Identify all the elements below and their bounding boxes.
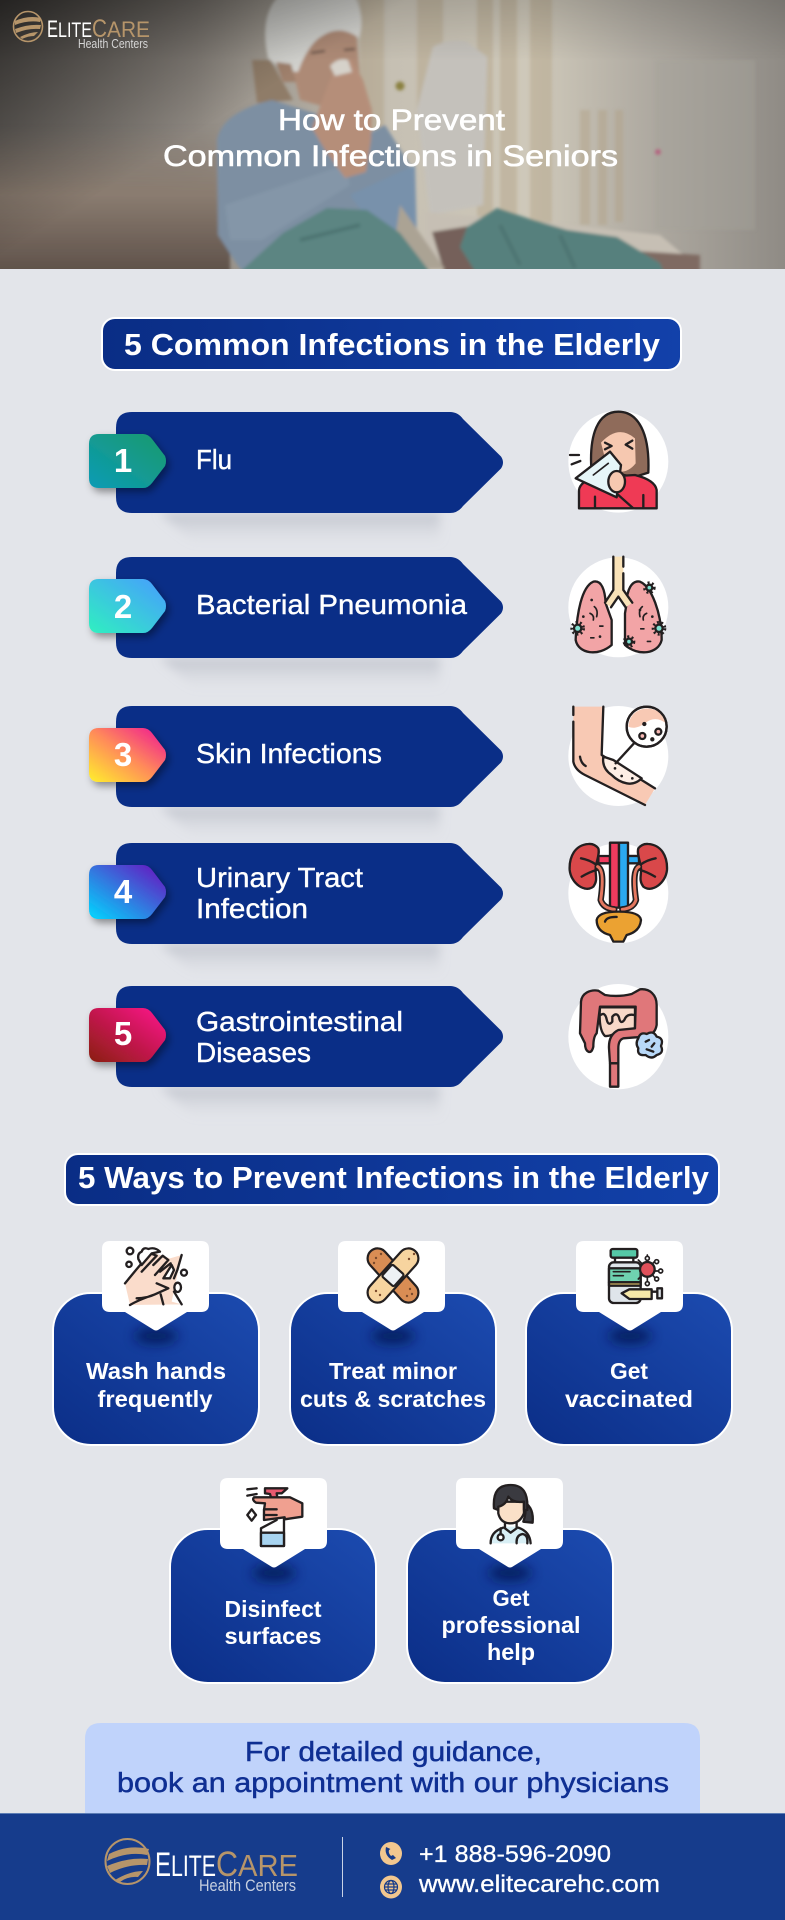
contact: phone number: +1 888-596-2090 <box>419 1841 611 1868</box>
banner 2: Bacterial Pneumonia: Bacterial Pneumonia <box>196 589 468 620</box>
badge 2: 2 <box>114 588 132 625</box>
icon: kidneys and bladder <box>568 843 668 943</box>
footer logo: Elite Care Health Centers: Health Centers <box>199 1877 296 1895</box>
card: Get professional help <box>407 1478 613 1683</box>
call to action panel: For detailed guidance, <box>245 1736 542 1767</box>
icon: crossed bandages <box>363 1244 423 1307</box>
badge 5 <box>89 1008 166 1062</box>
icon: phone <box>380 1842 402 1865</box>
badge 3: 3 <box>114 736 132 773</box>
header logo: Elite Care Health Centers: LITE <box>58 19 92 42</box>
badge 4 <box>89 865 166 919</box>
card: Wash hands frequently: frequently <box>98 1386 213 1412</box>
header logo: Elite Care Health Centers <box>14 12 150 51</box>
icon: vaccine vial, virus and syringe <box>609 1249 663 1303</box>
banner 4: Urinary Tract Infection: Urinary Tract <box>196 862 363 893</box>
card: Get professional help: professional <box>442 1612 580 1638</box>
title: How to Prevent <box>278 104 506 137</box>
banner 4: Urinary Tract Infection: Infection <box>196 893 308 924</box>
banner 3: Skin Infections <box>89 706 503 838</box>
title <box>163 104 618 173</box>
icon: arm with skin rash and magnifier <box>568 706 668 806</box>
header logo: Elite Care Health Centers: ARE <box>107 17 150 42</box>
banner 5: Gastrointestinal Diseases <box>89 986 503 1118</box>
footer logo: Elite Care Health Centers: ARE <box>238 1848 298 1883</box>
card: Get professional help: help <box>487 1639 535 1665</box>
header logo: Elite Care Health Centers: Health Centers <box>78 37 148 51</box>
card: Treat minor cuts & scratches: cuts & scratches <box>300 1386 486 1412</box>
footer band <box>0 1813 785 1920</box>
banner 3: Skin Infections: Skin Infections <box>196 738 382 769</box>
icon: washing hands <box>125 1248 187 1305</box>
icon: intestines with bacteria <box>568 984 668 1089</box>
call to action panel: book an appointment with our physicians <box>117 1767 669 1798</box>
heading: 5 Ways to Prevent Infections in the Elderly <box>65 1154 719 1205</box>
footer logo: Elite Care Health Centers: C <box>216 1845 238 1884</box>
banner 5: Gastrointestinal Diseases: Diseases <box>196 1037 311 1068</box>
header logo: Elite Care Health Centers: C <box>92 15 107 43</box>
badge 1: 1 <box>114 442 132 479</box>
badge 4: 4 <box>114 873 133 910</box>
call to action panel <box>85 1723 700 1813</box>
card: Get vaccinated: Get <box>610 1358 648 1384</box>
icon: globe <box>380 1876 402 1898</box>
heading: 5 Common Infections in the Elderly: 5 Common Infections in the Elderly <box>124 328 660 362</box>
card: Get professional help: Get <box>492 1585 530 1611</box>
footer logo: Elite Care Health Centers <box>106 1839 298 1895</box>
card: Disinfect surfaces: surfaces <box>224 1623 322 1649</box>
banner 5: Gastrointestinal Diseases: Gastrointestinal <box>196 1006 403 1037</box>
hero photo: senior woman blowing her nose on a sofa <box>0 0 785 280</box>
footer logo: Elite Care Health Centers: E <box>155 1846 171 1884</box>
badge 2 <box>89 579 166 633</box>
heading: 5 Ways to Prevent Infections in the Elderly: 5 Ways to Prevent Infections in the Elderly <box>78 1161 709 1195</box>
card: Wash hands frequently <box>53 1241 259 1445</box>
footer logo: Elite Care Health Centers: LITE <box>171 1850 216 1883</box>
badge 3 <box>89 728 166 782</box>
card: Wash hands frequently: Wash hands <box>86 1358 226 1384</box>
heading: 5 Common Infections in the Elderly <box>102 318 681 370</box>
badge 5: 5 <box>114 1015 132 1052</box>
banner 1: Flu <box>89 412 503 544</box>
card: Get vaccinated <box>526 1241 732 1445</box>
icon: spray bottle held in hand <box>247 1488 302 1546</box>
banner 2: Bacterial Pneumonia <box>89 557 503 689</box>
banner 1: Flu: Flu <box>196 444 232 475</box>
contact: website: www.elitecarehc.com <box>418 1871 660 1898</box>
card: Treat minor cuts & scratches <box>290 1241 496 1445</box>
icon: female doctor with stethoscope <box>491 1485 533 1543</box>
badge 1 <box>89 434 166 488</box>
title: Common Infections in Seniors <box>163 140 618 173</box>
card: Disinfect surfaces <box>170 1478 376 1683</box>
header logo: Elite Care Health Centers: E <box>47 16 58 43</box>
card: Get vaccinated: vaccinated <box>565 1386 693 1412</box>
card: Disinfect surfaces: Disinfect <box>224 1596 322 1622</box>
card: Treat minor cuts & scratches: Treat minor <box>329 1358 457 1384</box>
banner 4: Urinary Tract Infection <box>89 843 503 975</box>
icon: infected lungs <box>568 557 668 657</box>
icon: woman sneezing into tissue <box>568 411 668 513</box>
